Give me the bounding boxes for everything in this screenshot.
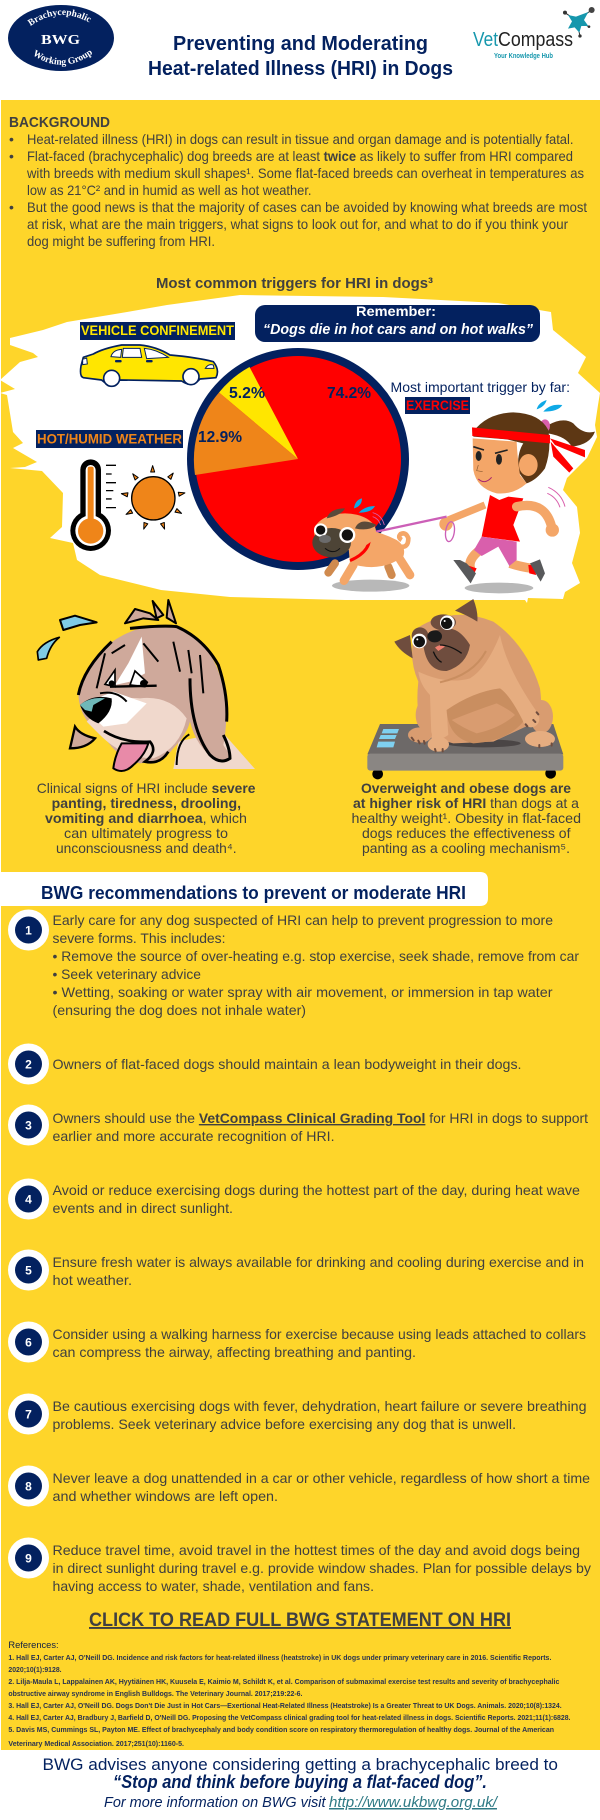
text: overweight dogs: dogs reduces the effectiveness of <box>362 825 571 841</box>
recommendation 1: severe forms. This includes: <box>52 930 226 946</box>
recommendation 6: 6 <box>25 1336 32 1350</box>
recommendation 4: Avoid or reduce exercising dogs during the hottest part of the day, during heat wave <box>52 1182 580 1198</box>
pie chart: triggers <box>191 352 405 566</box>
recommendation 4 <box>8 1178 580 1220</box>
text: most important trigger: EXERCISE <box>406 397 469 413</box>
logo: VetCompass: Vet <box>473 29 498 51</box>
references <box>8 1640 570 1748</box>
recommendation 1: 1 <box>25 924 32 938</box>
text block: background: • <box>9 199 14 215</box>
link: full statement: CLICK TO READ FULL BWG STATEMENT ON HRI <box>89 1610 511 1631</box>
recommendation 7: problems. Seek veterinary advice before exercising any dog that is unwell. <box>52 1416 516 1432</box>
recommendation 1: • Wetting, soaking or water spray with air movement, or immersion in tap water <box>52 984 553 1000</box>
recommendation 7: 7 <box>25 1408 32 1422</box>
logo: BWG <box>8 5 114 71</box>
text block: background <box>9 114 587 249</box>
text: overweight dogs: at higher risk of HRI than dogs at a <box>353 795 579 811</box>
logo: VetCompass <box>473 7 595 60</box>
text: overweight dogs: Overweight and obese dogs are <box>361 780 571 796</box>
text: clinical signs: Clinical signs of HRI include severe <box>37 780 256 796</box>
recommendation 5: hot weather. <box>52 1272 132 1288</box>
recommendation 6 <box>8 1322 586 1362</box>
recommendation 1: • Remove the source of over-heating e.g. stop exercise, seek shade, remove from car <box>52 948 579 964</box>
text block: background: BACKGROUND <box>9 114 110 131</box>
recommendation 1: (ensuring the dog does not inhale water) <box>52 1002 306 1018</box>
text: clinical signs <box>37 780 256 856</box>
recommendation 1 <box>8 910 579 1018</box>
references: obstructive airway syndrome in English Bulldogs. The Veterinary Journal. 2017;219:22-6. <box>8 1689 303 1698</box>
recommendation 2: 2 <box>25 1058 32 1072</box>
logo: BWG: Working Group <box>34 50 92 67</box>
heading: recommendations: BWG recommendations to prevent or moderate HRI <box>41 883 466 903</box>
recommendation 6: can compress the airway, affecting breathing and panting. <box>52 1344 416 1360</box>
recommendation 1: • Seek veterinary advice <box>52 966 201 982</box>
recommendation 8: Never leave a dog unattended in a car or other vehicle, regardless of how short a time <box>52 1470 590 1486</box>
recommendation 3 <box>8 1104 588 1146</box>
references: 2. Lilja-Maula L, Lappalainen AK, Hyytiäinen HK, Kuusela E, Kaimio M, Schildt K, et al. Comparison of submaximal exercise test results and severity of brachycephalic <box>8 1677 559 1686</box>
recommendation 4: 4 <box>25 1192 32 1206</box>
text block: background: low as 21°C² and in humid as well as hot weather. <box>27 182 312 198</box>
footer message <box>42 1755 558 1811</box>
title: Heat-related Illness (HRI) in Dogs <box>148 58 453 80</box>
recommendation 9: in direct sunlight during travel e.g. provide window shades. Plan for possible delays by <box>52 1560 591 1576</box>
pie chart: triggers: 74.2% <box>327 385 371 402</box>
recommendation 4: events and in direct sunlight. <box>52 1200 233 1216</box>
recommendation 9 <box>8 1538 591 1594</box>
icon: sun <box>121 466 185 530</box>
text block: background: • <box>9 131 14 147</box>
icon: thermometer <box>70 459 116 551</box>
references: Veterinary Medical Association. 2017;251(10):1160-5. <box>8 1739 184 1748</box>
recommendation 2: Owners of flat-faced dogs should maintain a lean bodyweight in their dogs. <box>52 1056 522 1072</box>
recommendation 5 <box>8 1250 584 1290</box>
recommendation 9: 9 <box>25 1552 32 1566</box>
references: 5. Davis MS, Cummings SL, Payton ME. Effect of brachycephaly and body condition score on respiratory thermoregulation of healthy dogs. Journal of the American <box>8 1725 554 1734</box>
label: vehicle confinement: VEHICLE CONFINEMENT <box>81 322 234 338</box>
pie chart: triggers: 5.2% <box>229 385 265 402</box>
references: 1. Hall EJ, Carter AJ, O'Neill DG. Incidence and risk factors for heat-related illness (heatstroke) in UK dogs under primary veterinary care in 2016. Scientific Reports. <box>8 1653 551 1662</box>
recommendation 8: and whether windows are left open. <box>52 1488 278 1504</box>
icon: car <box>81 345 217 386</box>
white brush background <box>0 295 600 603</box>
references: References: <box>8 1640 59 1651</box>
recommendation 3: Owners should use the VetCompass Clinical Grading Tool for HRI in dogs to support <box>52 1110 588 1126</box>
recommendation 5: 5 <box>25 1264 32 1278</box>
text: clinical signs: unconsciousness and death⁴. <box>56 840 237 856</box>
recommendation 3: 3 <box>25 1118 32 1132</box>
logo: VetCompass: Compass <box>498 29 573 51</box>
pie chart: triggers: 12.9% <box>198 429 242 446</box>
text: most important trigger <box>390 379 570 414</box>
illustration: running pug <box>312 498 410 592</box>
recommendation 3: earlier and more accurate recognition of HRI. <box>52 1128 334 1144</box>
heading: recommendations <box>0 872 488 906</box>
text: overweight dogs: panting as a cooling mechanism⁵. <box>362 840 570 856</box>
recommendation 9: having access to water, shade, ventilation and fans. <box>52 1578 374 1594</box>
illustration: overweight pug on scales <box>367 599 563 779</box>
text block: background: • <box>9 148 14 164</box>
recommendation 2 <box>8 1044 522 1084</box>
references: 4. Hall EJ, Carter AJ, Bradbury J, Barfield D, O'Neill DG. Proposing the VetCompass clinical grading tool for heat-related illness in dogs. Scientific Reports. 2021;11(1):6828. <box>8 1713 570 1722</box>
logo: BWG: BWG <box>41 33 80 48</box>
heading: triggers: Most common triggers for HRI in dogs³ <box>156 275 433 292</box>
recommendation 5: Ensure fresh water is always available for drinking and cooling during exercise and in <box>52 1254 584 1270</box>
text: clinical signs: vomiting and diarrhoea, which <box>45 810 247 826</box>
footer message: “Stop and think before buying a flat-faced dog”. <box>113 1772 487 1792</box>
text: overweight dogs: healthy weight¹. Obesity in flat-faced <box>352 810 581 826</box>
text block: background: dog might be suffering from HRI. <box>27 233 215 249</box>
callout: remember: “Dogs die in hot cars and on hot walks” <box>263 321 533 338</box>
references: 3. Hall EJ, Carter AJ, O'Neill DG. Dogs Don't Die Just in Hot Cars—Exertional Heat-Related Illness (Heatstroke) Is a Greater Threat to UK Dogs. Animals. 2020;10(8):1324. <box>8 1701 562 1710</box>
title <box>148 33 453 80</box>
label: hot/humid weather: HOT/HUMID WEATHER <box>37 430 182 446</box>
illustration: sad panting dog <box>37 600 255 771</box>
recommendation 1: Early care for any dog suspected of HRI can help to prevent progression to more <box>52 912 553 928</box>
callout: remember: Remember: <box>356 303 436 319</box>
footer message: For more information on BWG visit <box>104 1794 326 1811</box>
logo: BWG: Brachycephalic <box>27 9 91 26</box>
text block: background: at risk, what are the main triggers, what signs to look out for, and what to do if you think your <box>27 216 568 232</box>
recommendation 8: 8 <box>25 1480 32 1494</box>
text: clinical signs: can ultimately progress to <box>64 825 228 841</box>
footer message: http://www.ukbwg.org.uk/ <box>329 1794 499 1811</box>
text: clinical signs: panting, tiredness, drooling, <box>52 795 241 811</box>
recommendation 8 <box>8 1466 590 1506</box>
recommendation 6: Consider using a walking harness for exercise because using leads attached to collars <box>52 1326 586 1342</box>
logo: VetCompass: Your Knowledge Hub <box>494 53 553 60</box>
text block: background: Flat-faced (brachycephalic) dog breeds are at least twice as likely to suffer from HRI compared <box>27 148 573 164</box>
references: 2020;10(1):9128. <box>8 1665 62 1674</box>
callout: remember <box>255 303 540 342</box>
illustration: running woman <box>372 400 595 593</box>
recommendation 7 <box>8 1394 586 1434</box>
recommendation 7: Be cautious exercising dogs with fever, dehydration, heart failure or severe breathing <box>52 1398 586 1414</box>
recommendation 9: Reduce travel time, avoid travel in the hottest times of the day and avoid dogs being <box>52 1542 580 1558</box>
footer message: BWG advises anyone considering getting a brachycephalic breed to <box>42 1755 558 1774</box>
text block: background: Heat-related illness (HRI) in dogs can result in tissue and organ damage and is potentially fatal. <box>27 131 574 147</box>
text: most important trigger: Most important trigger by far: <box>390 379 570 395</box>
title: Preventing and Moderating <box>173 33 428 55</box>
text: overweight dogs <box>352 780 581 856</box>
